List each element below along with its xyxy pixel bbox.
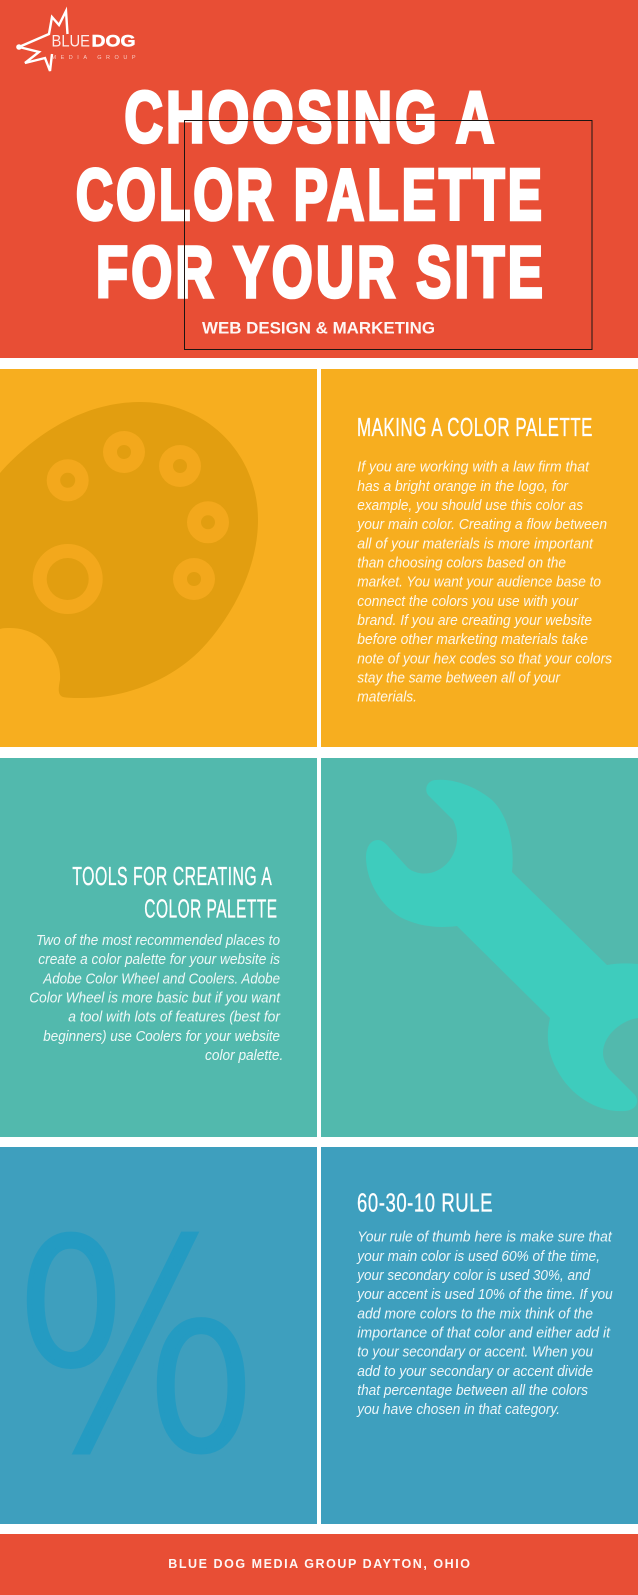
subtitle: WEB DESIGN & MARKETING bbox=[202, 319, 435, 337]
body text: that percentage between all the colors bbox=[357, 1383, 588, 1399]
body text: your main color is used 60% of the time, bbox=[356, 1249, 600, 1265]
heading: COLOR PALETTE bbox=[144, 894, 278, 924]
panel: tools for creating a color palette bbox=[0, 758, 317, 1137]
body text: beginners) use Coolers for your website bbox=[43, 1029, 280, 1045]
body text: your main color. Creating a flow between bbox=[356, 517, 607, 533]
body text: note of your hex codes so that your colors bbox=[357, 651, 612, 667]
body text: market. You want your audience base to bbox=[357, 575, 601, 591]
body text bbox=[356, 460, 612, 706]
body text: brand. If you are creating your website bbox=[357, 613, 592, 629]
heading: TOOLS FOR CREATING A bbox=[72, 861, 272, 891]
body text: Your rule of thumb here is make sure that bbox=[357, 1230, 613, 1246]
body text: you have chosen in that category. bbox=[356, 1402, 560, 1418]
title bbox=[76, 78, 546, 313]
outline frame bbox=[184, 120, 592, 350]
body text: color palette. bbox=[205, 1048, 283, 1064]
icon: percent sign: % bbox=[18, 1114, 254, 1531]
body text: materials. bbox=[357, 690, 417, 706]
footer text: BLUE DOG MEDIA GROUP DAYTON, OHIO bbox=[168, 1557, 470, 1571]
body text: Adobe Color Wheel and Coolers. Adobe bbox=[42, 971, 280, 987]
body text bbox=[356, 1230, 613, 1418]
body text: If you are working with a law firm that bbox=[357, 460, 590, 476]
body text: all of your materials is more important bbox=[357, 536, 594, 552]
panel: 60-30-10 rule bbox=[321, 1147, 638, 1524]
heading bbox=[72, 861, 278, 924]
panel: making a color palette bbox=[321, 369, 638, 747]
body text bbox=[29, 933, 283, 1064]
panel: palette illustration bbox=[0, 369, 317, 747]
body text: Color Wheel is more basic but if you want bbox=[29, 990, 281, 1006]
body text: add more colors to the mix think of the bbox=[357, 1306, 593, 1322]
body text: stay the same between all of your bbox=[357, 670, 561, 686]
body text: create a color palette for your website is bbox=[38, 952, 280, 968]
icon: wrench bbox=[366, 780, 638, 1111]
panel: footer bbox=[0, 1534, 638, 1595]
panel: header bbox=[0, 0, 638, 358]
icon: paint palette bbox=[0, 402, 258, 698]
panel: wrench illustration bbox=[321, 758, 638, 1137]
logo: Blue Dog Media Group: DOG bbox=[92, 33, 136, 51]
icon: dog star outline bbox=[16, 11, 68, 71]
body text: connect the colors you use with your bbox=[357, 594, 579, 610]
panel: percent illustration bbox=[0, 1114, 317, 1531]
body text: importance of that color and either add it bbox=[357, 1326, 611, 1342]
title: CHOOSING A bbox=[124, 78, 498, 158]
body text: before other marketing materials take bbox=[357, 632, 588, 648]
body text: Two of the most recommended places to bbox=[36, 933, 280, 949]
body text: a tool with lots of features (best for bbox=[68, 1010, 281, 1026]
logo wordmark: BLUE bbox=[52, 33, 90, 51]
logo tagline: MEDIA GROUP bbox=[52, 55, 136, 61]
body text: example, you should use this color as bbox=[357, 498, 583, 514]
logo: Blue Dog Media Group bbox=[16, 11, 136, 71]
heading: 60-30-10 RULE bbox=[357, 1188, 493, 1218]
body text: your secondary color is used 30%, and bbox=[356, 1268, 591, 1284]
body text: your accent is used 10% of the time. If you bbox=[356, 1287, 613, 1303]
body text: add to your secondary or accent divide bbox=[357, 1364, 593, 1380]
body text: than choosing colors based on the bbox=[357, 556, 566, 572]
body text: to your secondary or accent. When you bbox=[357, 1345, 593, 1361]
body text: has a bright orange in the logo, for bbox=[357, 479, 569, 495]
